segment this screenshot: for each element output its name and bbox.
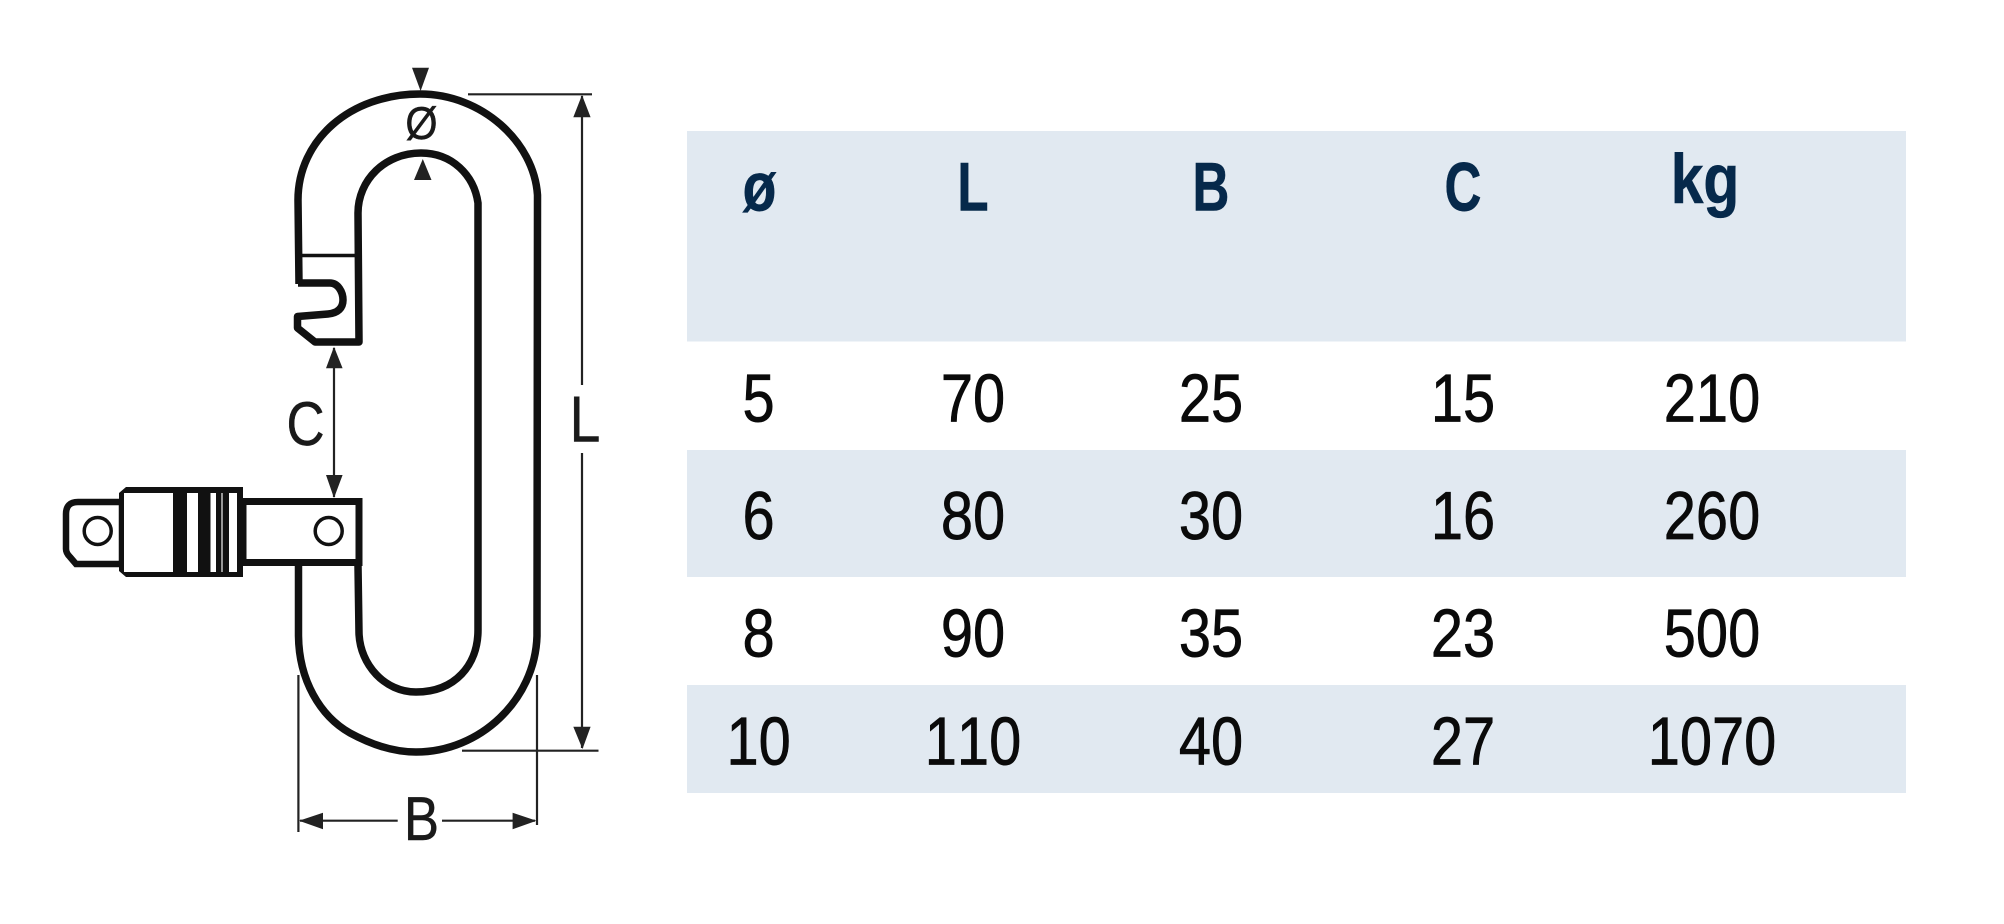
row: 8: [743, 596, 1760, 672]
dimension: L: [462, 94, 600, 751]
header labels: L: [957, 149, 989, 226]
row: 8: 23: [1431, 596, 1495, 672]
header labels: B: [1193, 149, 1229, 226]
row: 5: 70: [941, 360, 1005, 436]
row: 6: [743, 478, 1760, 554]
dimension: diameter: [405, 68, 438, 180]
row band: 10: [687, 685, 1906, 793]
row: 10: 27: [1431, 704, 1495, 780]
row band: 6: [687, 450, 1906, 577]
dimension: B: [298, 675, 537, 854]
dimension: diameter: Ø: [405, 97, 438, 149]
dimension: C: C: [286, 390, 325, 459]
row: 5: 15: [1431, 360, 1495, 436]
table: dimensions: [687, 131, 1906, 793]
row: 8: 35: [1179, 596, 1243, 672]
row: 8: 8: [743, 596, 775, 672]
row: 10: 110: [925, 704, 1021, 780]
row: 5: [743, 360, 1760, 436]
header labels: [743, 140, 1739, 226]
row: 8: 90: [941, 596, 1005, 672]
row: 6: 16: [1431, 478, 1495, 554]
row: 10: [726, 704, 1776, 780]
row: 6: 6: [743, 478, 775, 554]
swivel bar with eyelet: [243, 502, 359, 562]
carabiner body outline: [298, 94, 538, 752]
row: 10: 40: [1179, 704, 1243, 780]
row: 5: 25: [1179, 360, 1243, 436]
header labels: C: [1445, 149, 1481, 226]
row: 10: 1070: [1648, 704, 1776, 780]
row: 8: 500: [1664, 596, 1760, 672]
dimension: B: B: [404, 785, 439, 854]
dimension: C: [286, 347, 343, 498]
header labels: ø: [743, 148, 776, 226]
diagram: carabiner with dimensions: [66, 68, 600, 854]
row: 5: 210: [1664, 360, 1760, 436]
row: 6: 80: [941, 478, 1005, 554]
row: 10: 10: [726, 704, 791, 780]
dimension: L: L: [570, 383, 600, 456]
row: 6: 30: [1179, 478, 1243, 554]
header labels: kg: [1671, 140, 1739, 218]
row: 6: 260: [1664, 478, 1760, 554]
row: 5: 5: [743, 360, 775, 436]
header band: [687, 131, 1906, 342]
threaded barrel: [119, 487, 243, 577]
left tab with eyelet: [66, 502, 122, 564]
